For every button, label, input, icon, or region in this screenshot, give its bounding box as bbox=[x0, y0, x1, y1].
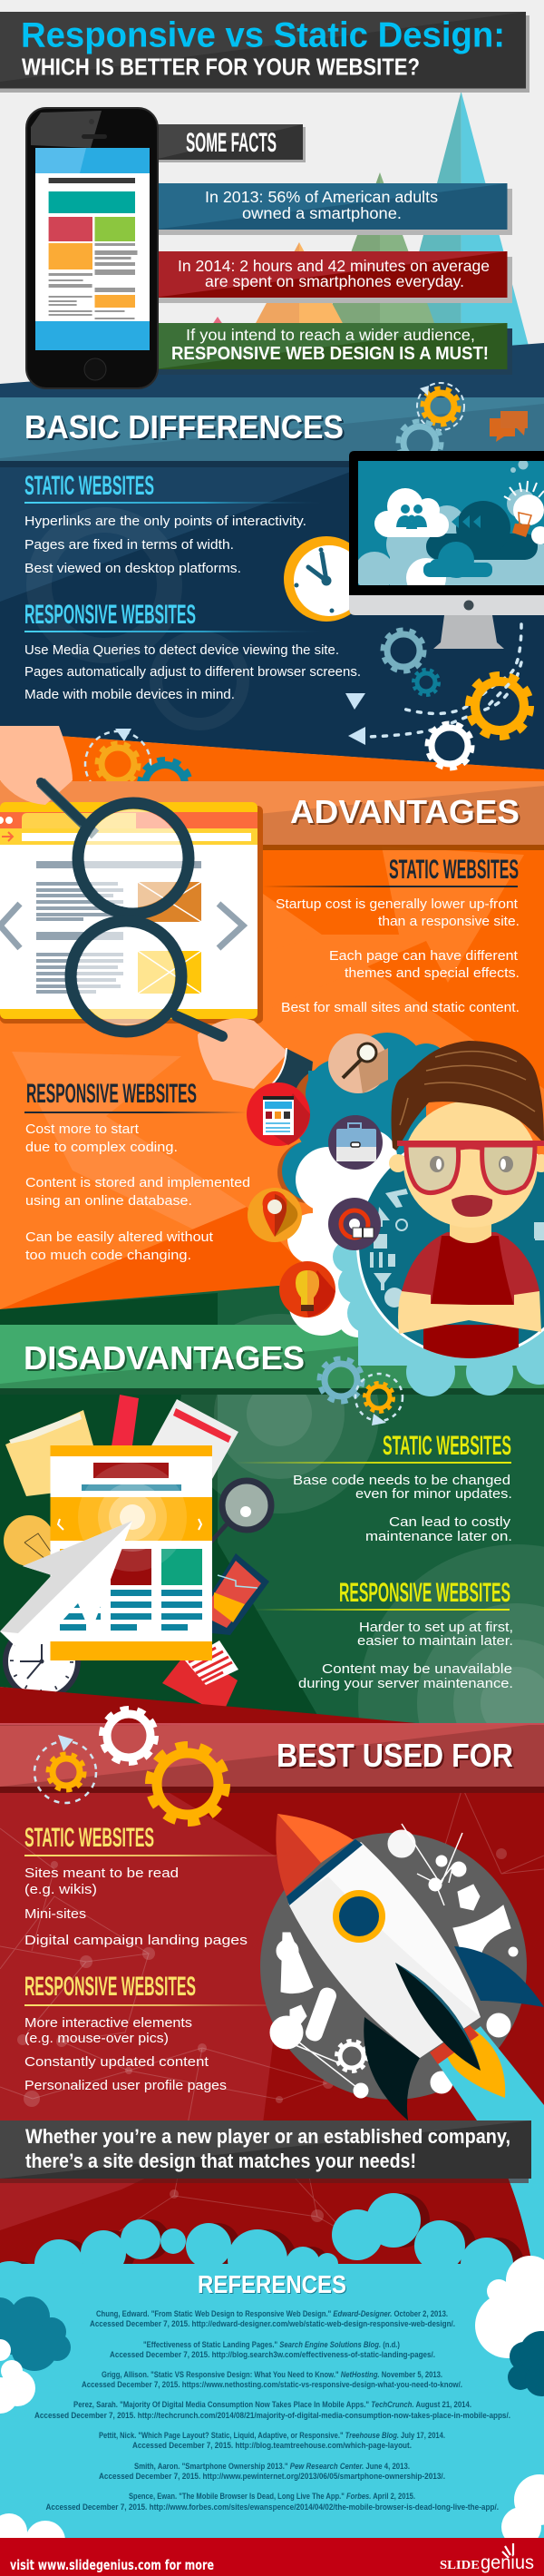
science icons bbox=[270, 1824, 518, 2098]
panel: static websites best used: Digital campaign landing pages bbox=[24, 1933, 248, 1948]
panel: static websites advantages: Startup cost is generally lower up-front bbox=[276, 896, 519, 912]
panel: static websites best used bbox=[24, 1823, 277, 1948]
nozzle bbox=[430, 2025, 479, 2064]
panel: advantages background bbox=[0, 732, 544, 1309]
icons: gears and speech bubbles bbox=[398, 383, 528, 465]
panel: responsive websites advantages: Content is stored and implemented bbox=[25, 1175, 250, 1190]
mid blue cloud bbox=[423, 542, 492, 578]
panel: static websites advantages bbox=[263, 855, 520, 1015]
folder bbox=[5, 1410, 93, 1496]
cloud: light blue bbox=[333, 1240, 544, 1396]
magnifier bbox=[210, 1524, 227, 1543]
panel: responsive websites disadvantages bbox=[254, 1578, 513, 1691]
panel: static websites differences: STATIC WEBSITES bbox=[24, 471, 154, 501]
logo: genius bbox=[481, 2552, 534, 2573]
panel: disadvantages background bbox=[0, 1264, 544, 1862]
window bbox=[333, 1890, 385, 1943]
closing message banner bbox=[0, 2121, 531, 2183]
panel: basic differences band bbox=[0, 397, 544, 467]
fact 2 panel bbox=[154, 251, 512, 303]
flame bbox=[435, 2026, 544, 2259]
illustration: web page with cursor and desk items bbox=[0, 1395, 271, 1715]
icon: smartphone bbox=[26, 108, 158, 388]
globe circle with icons bbox=[356, 1131, 544, 1358]
panel: static websites advantages: Each page can have different bbox=[329, 948, 519, 964]
panel: static websites disadvantages: Base code needs to be changed bbox=[293, 1473, 510, 1488]
light bulb bbox=[519, 461, 528, 470]
cloud: blue bbox=[277, 1066, 369, 1203]
decorative mountains bbox=[177, 92, 533, 377]
panel: responsive websites differences: Made with mobile devices in mind. bbox=[24, 687, 235, 702]
panel: static websites disadvantages: Can lead to costly bbox=[389, 1514, 511, 1530]
fact 1 panel: In 2013: 56% of American adults bbox=[205, 188, 438, 206]
panel: responsive websites advantages: Cost more to start bbox=[25, 1121, 140, 1137]
cloud: references background bbox=[0, 2193, 544, 2541]
clock bbox=[5, 1625, 78, 1698]
cursor arrow bbox=[0, 1521, 132, 1659]
fact 3 panel: If you intend to reach a wider audience, bbox=[186, 326, 475, 344]
panel: static websites disadvantages bbox=[236, 1431, 512, 1544]
icons: gears near disadvantages band bbox=[319, 1358, 403, 1425]
cyan backdrop for lower page bbox=[453, 2114, 544, 2541]
heading: advantages: ADVANTAGES bbox=[290, 793, 520, 830]
icon: briefcase badge bbox=[328, 1115, 383, 1170]
page bbox=[51, 1445, 212, 1660]
ruler bbox=[111, 1395, 139, 1452]
white gear at section edge bbox=[427, 723, 472, 769]
fact 3 panel: RESPONSIVE WEB DESIGN IS A MUST! bbox=[171, 344, 489, 364]
panel: best used for band bbox=[0, 1723, 544, 1793]
neck bbox=[450, 1216, 491, 1243]
panel: static websites advantages: than a responsive site. bbox=[378, 914, 520, 929]
shirt bbox=[402, 1232, 539, 1358]
panel: static websites advantages: Best for small sites and static content. bbox=[281, 1000, 520, 1015]
panel: responsive websites differences: Pages automatically adjust to different browser screens. bbox=[24, 664, 361, 680]
panel: best used for background bbox=[0, 1687, 544, 2359]
backdrop circle bbox=[260, 1833, 527, 2100]
panel: static websites best used: Mini-sites bbox=[24, 1906, 86, 1922]
icon: magnifier badge bbox=[328, 1033, 388, 1093]
panel: responsive websites differences bbox=[24, 600, 361, 702]
panel: responsive websites best used: Personalized user profile pages bbox=[24, 2078, 227, 2093]
references list: Smith, Aaron. "Smartphone Ownership 2013." Pew Research Center. June 4, 2013. bbox=[134, 2462, 410, 2472]
panel: responsive websites advantages: too much code changing. bbox=[25, 1248, 191, 1263]
panel: responsive websites disadvantages: easier to maintain later. bbox=[357, 1633, 513, 1649]
tablet bbox=[209, 1553, 269, 1635]
panel: static websites disadvantages: even for minor updates. bbox=[355, 1486, 512, 1502]
fact 2 panel: are spent on smartphones everyday. bbox=[205, 272, 464, 290]
panel: disadvantages band bbox=[0, 1325, 544, 1395]
panel: static websites advantages: themes and special effects. bbox=[345, 965, 520, 981]
illustration: rocket bbox=[260, 1814, 544, 2259]
panel: responsive websites disadvantages: Content may be unavailable bbox=[322, 1661, 512, 1677]
icon: clock bbox=[284, 536, 369, 622]
panel: static websites differences: Pages are fixed in terms of width. bbox=[24, 537, 234, 553]
footer bar bbox=[0, 2538, 544, 2576]
panel: responsive websites advantages: using an online database. bbox=[25, 1193, 192, 1209]
some facts label bbox=[154, 124, 306, 162]
heading: basic differences: BASIC DIFFERENCES bbox=[24, 408, 344, 446]
panel: advantages band bbox=[0, 781, 544, 850]
centre fin bbox=[395, 1963, 481, 2071]
fact 1 panel bbox=[154, 183, 512, 235]
references list: Accessed December 7, 2015. http://edward-designer.com/web/static-web-design-responsive-web-design/. bbox=[90, 2319, 455, 2329]
dark blue section background bbox=[0, 343, 544, 769]
arms bbox=[398, 1291, 541, 1334]
icon: browser window bbox=[0, 802, 263, 1024]
hair bbox=[392, 1041, 544, 1151]
fact 1 panel: owned a smartphone. bbox=[242, 204, 402, 222]
panel: responsive websites best used bbox=[24, 1972, 267, 2093]
panel: static websites differences: Hyperlinks are the only points of interactivity. bbox=[24, 514, 306, 529]
mouth bbox=[452, 1195, 492, 1217]
icon: light bulb badge bbox=[279, 1261, 335, 1317]
panel: static websites differences bbox=[24, 471, 322, 576]
icon: film badge bbox=[328, 1198, 381, 1250]
title banner bbox=[0, 12, 529, 93]
closing message banner: there’s a site design that matches your needs! bbox=[25, 2150, 416, 2172]
references list: "Effectiveness of Static Landing Pages." Search Engine Solutions Blog. (n.d.) bbox=[143, 2340, 400, 2350]
references list: Pettit, Nick. "Which Page Layout? Static, Liquid, Adaptive, or Responsive." Treehouse Blog. July 17, 2014. bbox=[99, 2431, 445, 2441]
icon: document badge bbox=[247, 1082, 310, 1146]
panel: static websites best used: (e.g. wikis) bbox=[24, 1882, 97, 1897]
fins bbox=[454, 1946, 544, 2007]
paper bbox=[151, 1399, 238, 1479]
body bbox=[288, 1842, 481, 2058]
heading: references: REFERENCES bbox=[198, 2270, 346, 2298]
heading: best used for: BEST USED FOR bbox=[277, 1737, 513, 1774]
references list bbox=[34, 2309, 510, 2512]
references list: Grigg, Allison. "Static VS Responsive Design: What You Need to Know." NetHosting. November 5, 2013. bbox=[102, 2370, 442, 2380]
panel: responsive websites differences: RESPONSIVE WEBSITES bbox=[24, 600, 196, 630]
yellow badge bbox=[4, 1515, 54, 1566]
glasses bbox=[406, 1145, 459, 1193]
references list: Chung, Edward. "From Static Web Design to Responsive Web Design." Edward-Designer. October 2, 2013. bbox=[96, 2309, 448, 2319]
some facts label: SOME FACTS bbox=[186, 128, 277, 158]
subtitle: WHICH IS BETTER FOR YOUR WEBSITE? bbox=[22, 53, 420, 80]
references list: Spence, Ewan. "The Mobile Browser Is Dead, Long Live The App." Forbes. April 2, 2015. bbox=[129, 2492, 415, 2502]
panel: responsive websites best used: Constantly updated content bbox=[24, 2054, 209, 2070]
fact 2 panel: In 2014: 2 hours and 42 minutes on average bbox=[178, 257, 490, 275]
panel: static websites differences: Best viewed on desktop platforms. bbox=[24, 561, 241, 576]
panel: static websites disadvantages: maintenance later on. bbox=[365, 1529, 512, 1544]
panel: responsive websites disadvantages: during your server maintenance. bbox=[298, 1676, 513, 1691]
references list: Accessed December 7, 2015. http://www.pewinternet.org/2013/06/05/smartphone-ownership-2013/. bbox=[99, 2472, 445, 2482]
icon: map pin badge bbox=[248, 1188, 302, 1242]
icon: hand holding magnifier bottom bbox=[71, 921, 313, 1092]
panel: responsive websites advantages: Can be easily altered without bbox=[25, 1229, 214, 1245]
illustration: character with cloud and icons bbox=[247, 1033, 544, 1396]
footer link text: visit www.slidegenius.com for more bbox=[10, 2557, 214, 2573]
glow bbox=[78, 1463, 187, 1572]
panel: responsive websites advantages: due to complex coding. bbox=[25, 1140, 178, 1155]
references list: Accessed December 7, 2015. http://blog.search3w.com/effectiveness-of-static-landing-pages/. bbox=[110, 2350, 435, 2360]
references list: Perez, Sarah. "Majority Of Digital Media Consumption Now Takes Place In Mobile Apps." TechCrunch. August 21, 2014. bbox=[73, 2400, 471, 2410]
panel: responsive websites advantages: RESPONSIVE WEBSITES bbox=[26, 1079, 197, 1109]
panel: responsive websites best used: More interactive elements bbox=[24, 2015, 192, 2031]
cloud: white bbox=[287, 1130, 397, 1337]
icon: hand holding magnifier top bbox=[0, 726, 189, 914]
logo bbox=[440, 2543, 534, 2573]
references list: Accessed December 7, 2015. http://blog.teamtreehouse.com/which-page-layout. bbox=[132, 2441, 412, 2451]
panel: responsive websites best used: RESPONSIVE WEBSITES bbox=[24, 1972, 196, 2002]
icon: desktop monitor bbox=[349, 451, 544, 649]
icons: lower gears with dashed arrows bbox=[345, 624, 530, 745]
panel: responsive websites advantages bbox=[24, 1079, 250, 1263]
panel: static websites best used: Sites meant to be read bbox=[24, 1866, 179, 1881]
icons: gears in best used for band bbox=[34, 1709, 227, 1823]
title heading: Responsive vs Static Design: bbox=[21, 16, 505, 55]
logo: SLIDE bbox=[440, 2559, 480, 2572]
light clouds bbox=[355, 489, 544, 592]
head bbox=[389, 1154, 407, 1172]
fact 3 panel bbox=[154, 323, 512, 375]
decorative side clouds bbox=[0, 2256, 544, 2561]
panel: responsive websites differences: Use Media Queries to detect device viewing the site. bbox=[24, 642, 339, 658]
panel: static websites best used: STATIC WEBSITES bbox=[24, 1823, 154, 1853]
nose bbox=[276, 1814, 321, 1896]
icons: gears above browser bbox=[85, 729, 190, 810]
panel: responsive websites disadvantages: Harder to set up at first, bbox=[359, 1620, 513, 1635]
references list: Accessed December 7, 2015. https://www.nethosting.com/static-vs-responsive-design-what-you-need-to-know/. bbox=[82, 2380, 462, 2390]
dark cloud bbox=[426, 501, 538, 560]
envelope bbox=[162, 1649, 238, 1715]
white cloud with people bbox=[374, 488, 449, 537]
heading: disadvantages: DISADVANTAGES bbox=[24, 1339, 305, 1376]
panel: responsive websites best used: (e.g. mouse-over pics) bbox=[24, 2031, 169, 2046]
